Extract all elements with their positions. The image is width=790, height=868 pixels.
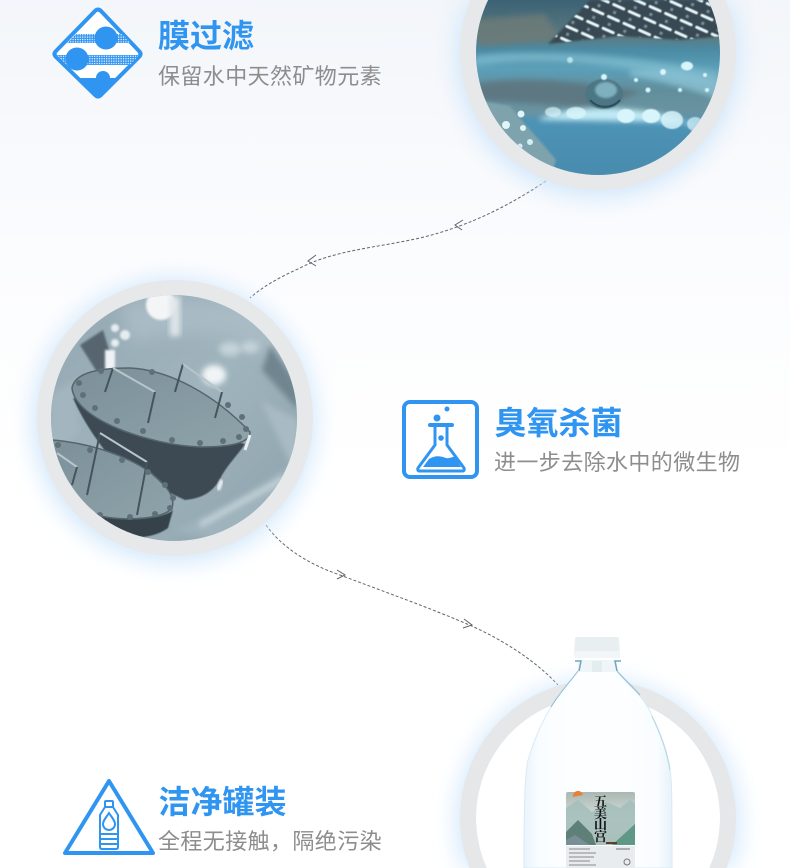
bottle neck <box>578 660 617 672</box>
arrow: chevron lower <box>308 255 316 266</box>
dashed path: ozone to bottling <box>266 525 558 685</box>
arrow: chevron upper <box>455 220 463 230</box>
bottle label: 山 <box>594 817 607 832</box>
tank: lower lid <box>50 433 176 538</box>
heading: clean bottling: 洁净罐装 <box>158 784 287 820</box>
product: water bottle <box>524 637 672 868</box>
arrow: chevron first <box>337 570 345 579</box>
arrow: chevron second <box>463 619 472 628</box>
bottle label: 美 <box>594 806 607 821</box>
ring: bottling photo circle <box>457 680 739 868</box>
tank: upper lid <box>72 364 250 500</box>
text: clean bottling description: 全程无接触，隔绝污染 <box>158 829 382 854</box>
water droplet <box>585 79 623 109</box>
bottle label <box>566 791 635 845</box>
bokeh highlights <box>545 57 709 131</box>
bottle cap <box>574 637 620 658</box>
photo circle: ozone tanks <box>33 280 315 562</box>
icon: flask in rounded square <box>404 402 477 477</box>
heading: membrane filter: 膜过滤 <box>158 18 254 54</box>
icon: bottle in triangle <box>65 781 153 853</box>
text: ozone description: 进一步去除水中的微生物 <box>494 450 740 475</box>
bottle label: 五 <box>594 794 607 809</box>
heading: ozone sterilization: 臭氧杀菌 <box>494 405 623 441</box>
water splash <box>486 102 556 167</box>
text: membrane filter description: 保留水中天然矿物元素 <box>158 64 382 89</box>
bottle label: 宫 <box>594 829 607 844</box>
icon: membrane diamond <box>54 10 140 97</box>
photo circle: membrane filter <box>457 0 739 197</box>
dashed path: membrane to ozone <box>250 181 546 298</box>
bottle info panel <box>566 846 635 868</box>
